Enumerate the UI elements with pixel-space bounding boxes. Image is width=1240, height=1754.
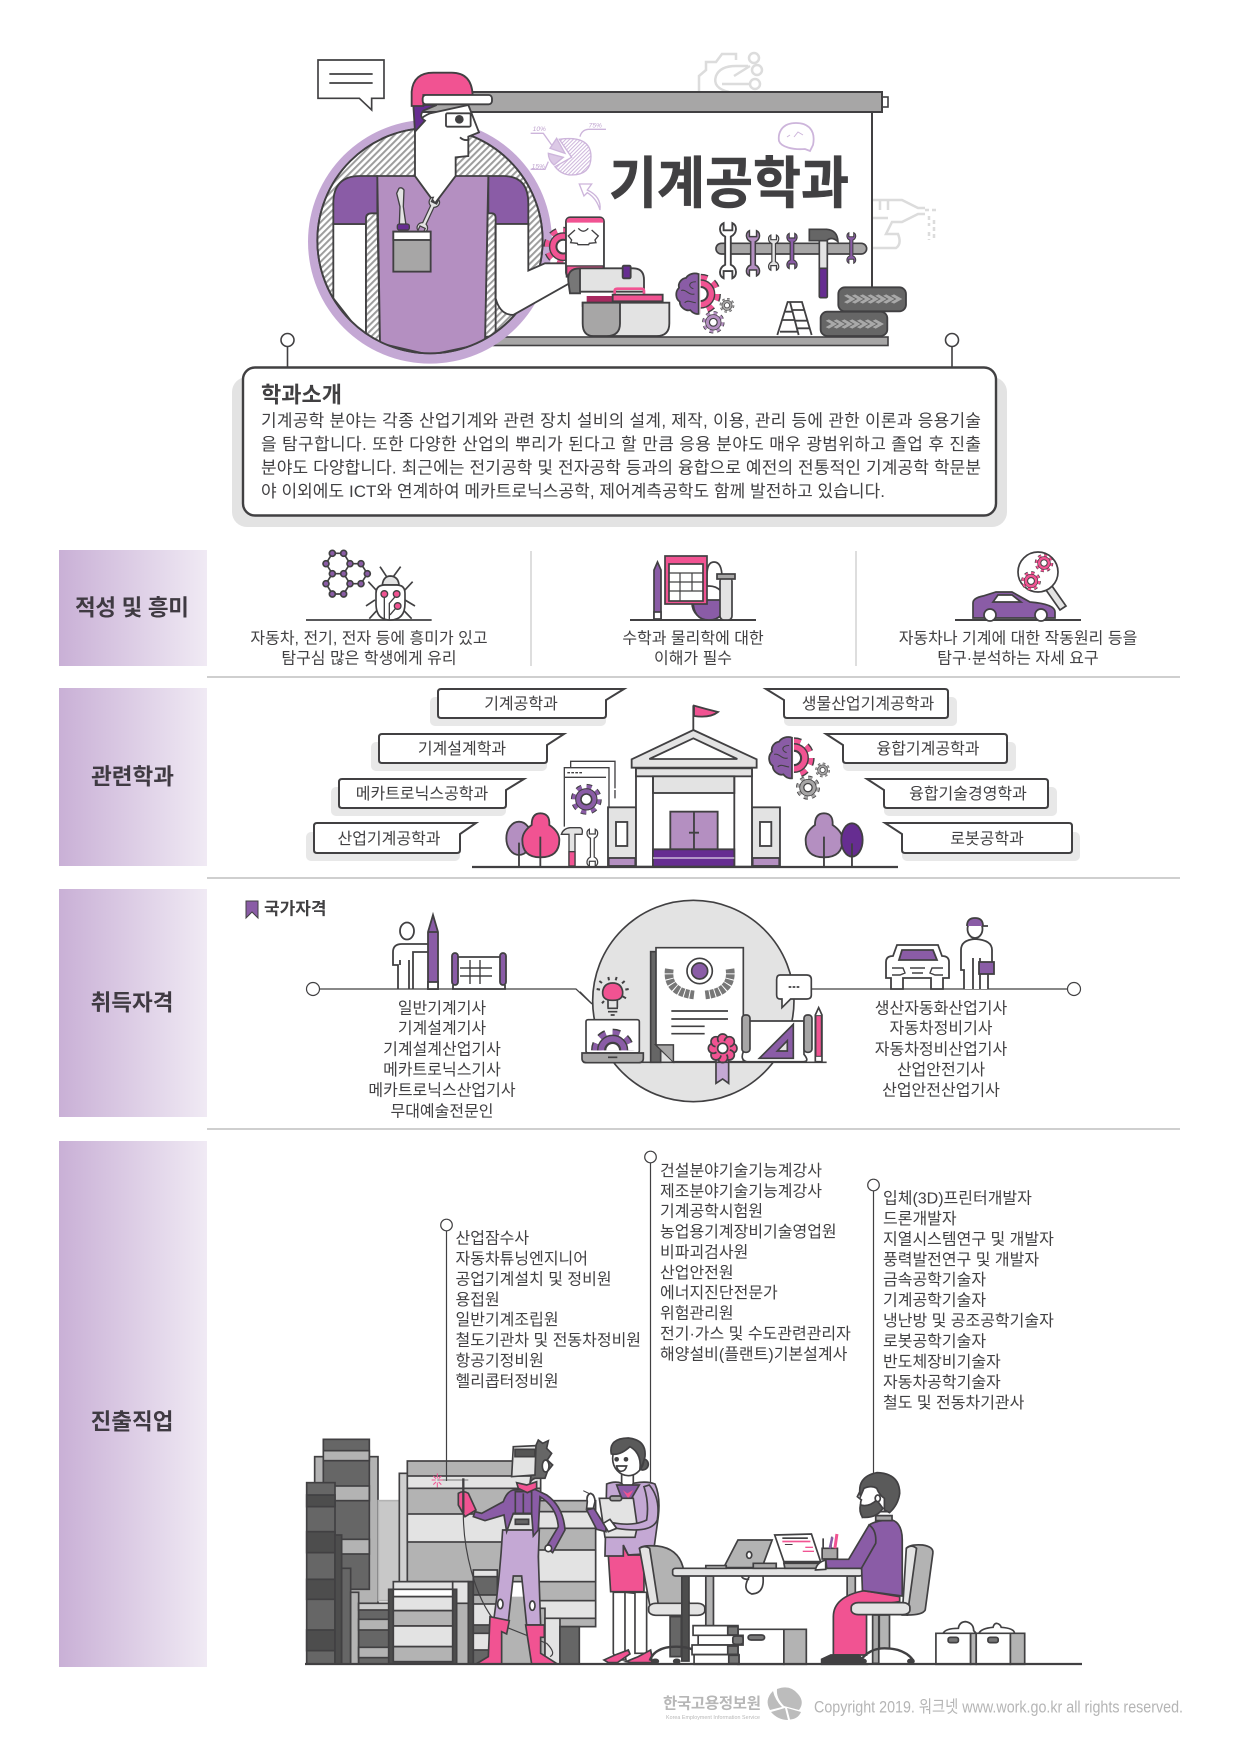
- icon: toolbox: [568, 266, 669, 336]
- text block: introduction: 야 이외에도 ICT와 연계하여 메카트로닉스공학, 제어계측공학도 함께 발전하고 있습니다.: [261, 482, 885, 501]
- intro pins: [281, 334, 958, 367]
- text: aptitude 2: 수학과 물리학에 대한: [622, 630, 764, 648]
- icon: faded speech bubble: [779, 123, 814, 151]
- text: qualifications left: 무대예술전문인: [390, 1102, 494, 1120]
- illustration: bags: [936, 1622, 1025, 1664]
- chart: hand-drawn pie: [531, 122, 606, 210]
- text: aptitude 2: [622, 630, 764, 668]
- callout: 융합기술경영학과: 융합기술경영학과: [909, 785, 1027, 803]
- text block: introduction: [261, 412, 981, 501]
- callout: 로봇공학과: 로봇공학과: [950, 830, 1024, 848]
- icon: molecule and bug: [306, 550, 432, 620]
- text: qualifications right: 자동차정비기사: [889, 1020, 993, 1038]
- icon: mechanic in circle: [308, 73, 604, 364]
- text block: careers column 2: 해양설비(플랜트)기본설계사: [660, 1346, 848, 1364]
- icon: faded gear circuit: [699, 53, 762, 92]
- panel: qualifications label: [59, 889, 207, 1117]
- callout: 융합기술경영학과: [867, 779, 1057, 816]
- connector: career pin 1: [441, 1219, 452, 1481]
- text: qualifications right: 생산자동화산업기사: [875, 1000, 1008, 1018]
- text: aptitude 1: 자동차, 전기, 전자 등에 흥미가 있고: [250, 630, 488, 648]
- illustration: stacked machines: [307, 1439, 596, 1664]
- text: qualifications right: 산업안전산업기사: [882, 1082, 1000, 1100]
- chart: hand-drawn pie: 10%: [533, 126, 546, 133]
- icon: bookmark: [246, 901, 258, 918]
- icon: footer logo: [768, 1687, 802, 1720]
- text block: careers column 2: 에너지진단전문가: [660, 1284, 778, 1302]
- text block: introduction: 을 탐구합니다. 또한 다양한 산업의 뿌리가 된다고 할 만큼 응용 분야도 매우 광범위하고 졸업 후 진출: [261, 435, 981, 454]
- panel: aptitude label: 적성 및 흥미: [75, 596, 189, 620]
- text block: careers column 2: 산업안전원: [660, 1264, 734, 1282]
- text block: careers column 1: 용접원: [456, 1291, 500, 1309]
- footer: copyright: Copyright 2019. 워크넷 www.work.go.kr all rights reserved.: [814, 1698, 1183, 1716]
- text: qualifications left: 메카트로닉스산업기사: [368, 1082, 516, 1100]
- heading: national qualification: 국가자격: [264, 900, 327, 918]
- text block: careers column 3: 입체(3D)프린터개발자: [883, 1190, 1032, 1208]
- icon: trees, tools and window: [506, 737, 863, 867]
- text block: careers column 2: 건설분야기술기능계강사: [660, 1162, 822, 1180]
- callout: 기계설계학과: [371, 734, 564, 771]
- text: aptitude 3: [899, 630, 1137, 668]
- footer: organisation name: [663, 1694, 761, 1721]
- text: qualifications right: [875, 1000, 1008, 1100]
- callout: 생물산업기계공학과: [766, 689, 957, 726]
- text block: careers column 1: 자동차튜닝엔지니어: [456, 1250, 588, 1268]
- callout: 기계공학과: [430, 689, 624, 726]
- text block: careers column 3: 자동차공학기술자: [883, 1374, 1001, 1392]
- connector: career pin 2: [645, 1151, 656, 1483]
- callout: 융합기계공학과: [826, 734, 1016, 771]
- text block: careers column 1: 일반기계조립원: [456, 1311, 559, 1329]
- text block: careers column 3: 철도 및 전동차기관사: [883, 1394, 1025, 1412]
- text block: careers column 3: 지열시스템연구 및 개발자: [883, 1230, 1054, 1248]
- text block: careers column 1: 헬리콥터정비원: [456, 1372, 559, 1390]
- text block: careers column 3: [883, 1190, 1054, 1412]
- connector: right qualification line: [812, 982, 1080, 996]
- text block: careers column 3: 반도체장비기술자: [883, 1353, 1001, 1371]
- text block: careers column 2: 농업용기계장비기술영업원: [660, 1223, 837, 1241]
- text block: careers column 3: 드론개발자: [883, 1210, 957, 1228]
- text: aptitude 3: 자동차나 기계에 대한 작동원리 등을: [899, 630, 1137, 648]
- text block: careers column 2: 제조분야기술기능계강사: [660, 1182, 822, 1200]
- text: aptitude 1: 탐구심 많은 학생에게 유리: [281, 650, 457, 668]
- heading: department introduction: 학과소개: [261, 382, 342, 408]
- text block: careers column 3: 금속공학기술자: [883, 1271, 986, 1289]
- text block: careers column 2: [660, 1162, 851, 1364]
- icon: certificate circle: [580, 900, 827, 1102]
- text block: introduction: 분야도 다양합니다. 최근에는 전기공학 및 전자공학 등과의 융합으로 예전의 전통적인 기계공학 학문분: [261, 458, 981, 478]
- connector: career pin 3: [868, 1179, 879, 1473]
- callout: 기계공학과: 기계공학과: [484, 695, 558, 713]
- icon: car and worker: [886, 918, 994, 989]
- icon: tool rail: [716, 223, 867, 298]
- icon: engineer with pencil: [393, 915, 506, 989]
- text block: careers column 3: 냉난방 및 공조공학기술자: [883, 1312, 1054, 1330]
- panel: related departments label: [59, 688, 207, 866]
- projection screen: [420, 92, 888, 346]
- text block: careers column 3: 풍력발전연구 및 개발자: [883, 1251, 1039, 1269]
- text: aptitude 2: 이해가 필수: [654, 650, 732, 668]
- chart: hand-drawn pie: 75%: [589, 122, 602, 129]
- illustration: office desk: [639, 1534, 862, 1663]
- text: qualifications left: 기계설계산업기사: [383, 1040, 501, 1058]
- callout: 메카트로닉스공학과: 메카트로닉스공학과: [356, 785, 489, 803]
- footer: organisation name: Korea Employment Information Service: [666, 1715, 760, 1721]
- text: qualifications left: [368, 1000, 516, 1120]
- text block: careers column 1: 산업잠수사: [456, 1230, 529, 1248]
- icon: tires: [821, 287, 906, 336]
- text block: careers column 1: [456, 1230, 641, 1390]
- illustration: seated man: [816, 1473, 933, 1664]
- title: 기계공학과: [609, 152, 849, 215]
- connector: left qualification line: [306, 982, 592, 1004]
- text block: careers column 3: 기계공학기술자: [883, 1292, 986, 1310]
- text: qualifications right: 자동차정비산업기사: [875, 1040, 1008, 1058]
- text: qualifications left: 일반기계기사: [398, 1000, 486, 1018]
- icon: calculator and flask: [630, 556, 756, 620]
- text block: careers column 2: 비파괴검사원: [660, 1244, 748, 1262]
- panel: careers label: [59, 1141, 207, 1667]
- text: qualifications left: 기계설계기사: [398, 1020, 486, 1038]
- illustration: woman with clipboard: [583, 1438, 659, 1663]
- callout: 기계설계학과: 기계설계학과: [418, 740, 506, 758]
- footer: organisation name: 한국고용정보원: [663, 1694, 761, 1712]
- text: qualifications left: 메카트로닉스기사: [383, 1061, 501, 1079]
- text block: careers column 1: 항공기정비원: [456, 1352, 544, 1370]
- callout: 산업기계공학과: 산업기계공학과: [337, 830, 441, 848]
- panel: careers label: 진출직업: [91, 1410, 173, 1434]
- text block: careers column 1: 공업기계설치 및 정비원: [456, 1270, 612, 1288]
- text block: introduction: 기계공학 분야는 각종 산업기계와 관련 장치 설비의 설계, 제작, 이용, 관리 등에 관한 이론과 응용기술: [261, 412, 981, 430]
- text block: careers column 2: 기계공학시험원: [660, 1202, 763, 1220]
- icon: speech bubble: [318, 60, 384, 110]
- panel: qualifications label: 취득자격: [91, 990, 173, 1016]
- text block: careers column 2: 위험관리원: [660, 1304, 734, 1322]
- callout: 로봇공학과: [885, 823, 1080, 861]
- icon: car and magnifier: [955, 552, 1081, 621]
- icon: ladder: [777, 302, 812, 335]
- callout: 융합기계공학과: 융합기계공학과: [876, 740, 980, 758]
- text block: careers column 1: 철도기관차 및 전동차정비원: [456, 1332, 641, 1350]
- text block: careers column 3: 로봇공학기술자: [883, 1332, 986, 1350]
- icon: brain and gears: [676, 273, 733, 331]
- callout: 생물산업기계공학과: 생물산업기계공학과: [802, 695, 935, 713]
- icon: university building: [608, 705, 780, 867]
- callout: 메카트로닉스공학과: [331, 779, 524, 816]
- illustration: welder: [432, 1440, 565, 1664]
- icon: faded drill: [872, 200, 938, 248]
- illustration: books and boxes: [692, 1626, 806, 1664]
- text: qualifications right: 산업안전기사: [897, 1061, 985, 1079]
- chart: hand-drawn pie: 15%: [532, 163, 545, 170]
- panel: related departments label: 관련학과: [91, 764, 174, 790]
- panel: aptitude label: [59, 550, 207, 666]
- text: aptitude 1: [250, 630, 488, 668]
- text block: careers column 2: 전기·가스 및 수도관련관리자: [660, 1325, 851, 1343]
- panel: department introduction: [232, 368, 1007, 527]
- text: aptitude 3: 탐구·분석하는 자세 요구: [937, 650, 1099, 668]
- callout: 산업기계공학과: [306, 823, 476, 861]
